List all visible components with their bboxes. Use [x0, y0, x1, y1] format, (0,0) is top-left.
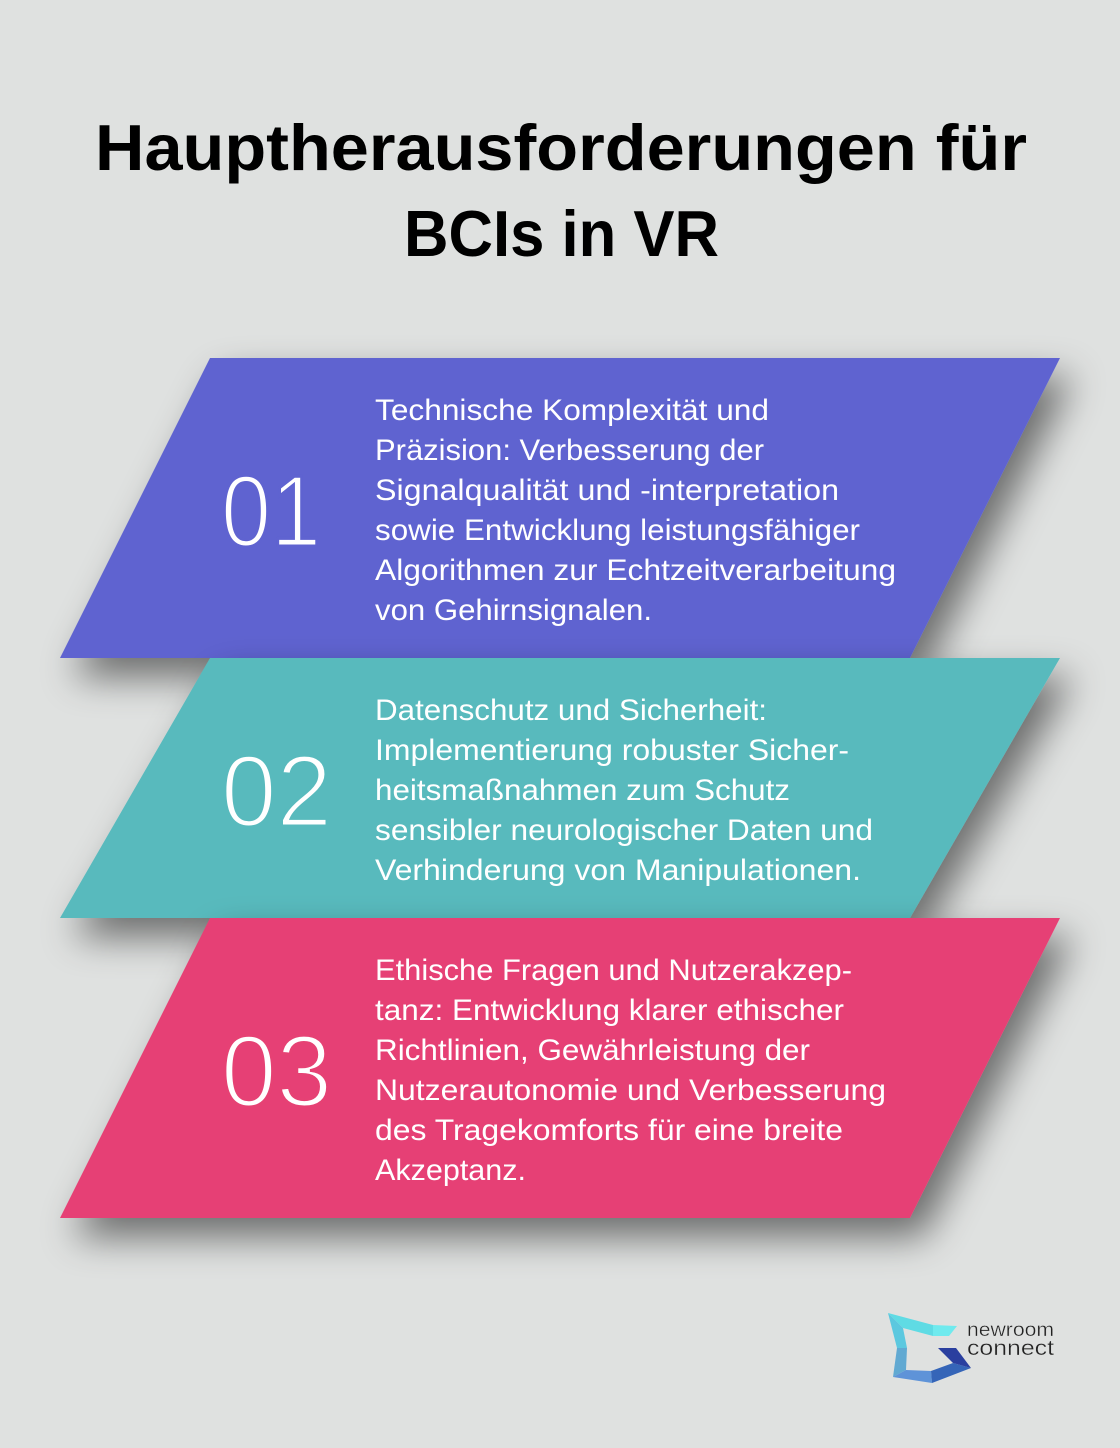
- text block 02: Verhinderung von Manipulationen.: [375, 854, 861, 887]
- text block 01: von Gehirnsignalen.: [375, 594, 652, 627]
- text block 03: [375, 954, 886, 1187]
- text block 03: tanz: Entwicklung klarer ethischer: [375, 994, 844, 1027]
- text block 02: [375, 694, 873, 887]
- logo wordmark: newroom: [967, 1320, 1054, 1341]
- text block 01: Technische Komplexität und: [375, 394, 769, 427]
- text block 03: Akzeptanz.: [375, 1154, 526, 1187]
- text block 01: Algorithmen zur Echtzeitverarbeitung: [375, 554, 896, 587]
- text block 03: Ethische Fragen und Nutzerakzep-: [375, 954, 852, 987]
- title: Hauptherausforderungen für: [95, 111, 1027, 184]
- text block 02: sensibler neurologischer Daten und: [375, 814, 873, 847]
- text block 01: [375, 394, 896, 627]
- logo: newroom connect: [888, 1313, 1054, 1383]
- text block 01: Signalqualität und -interpretation: [375, 474, 839, 507]
- text block 03: des Tragekomforts für eine breite: [375, 1114, 843, 1147]
- text block 02: heitsmaßnahmen zum Schutz: [375, 774, 790, 807]
- panel: 03 ethics: [60, 918, 1060, 1218]
- text block 01: Präzision: Verbesserung der: [375, 434, 764, 467]
- title: [95, 111, 1027, 270]
- text block 03: Nutzerautonomie und Verbesserung: [375, 1074, 886, 1107]
- icon: logo mark: [888, 1313, 971, 1383]
- number 01: 01: [221, 456, 321, 568]
- panel: 02 data protection: [60, 658, 1060, 918]
- number 03: 03: [221, 1016, 332, 1128]
- text block 01: sowie Entwicklung leistungsfähiger: [375, 514, 860, 547]
- logo wordmark: connect: [967, 1337, 1054, 1360]
- text block 02: Implementierung robuster Sicher-: [375, 734, 849, 767]
- number 02: 02: [221, 736, 332, 848]
- text block 02: Datenschutz und Sicherheit:: [375, 694, 767, 727]
- text block 03: Richtlinien, Gewährleistung der: [375, 1034, 810, 1067]
- logo wordmark: [967, 1320, 1054, 1360]
- panel: 01 technical complexity: [60, 358, 1060, 658]
- title: BCIs in VR: [404, 197, 719, 270]
